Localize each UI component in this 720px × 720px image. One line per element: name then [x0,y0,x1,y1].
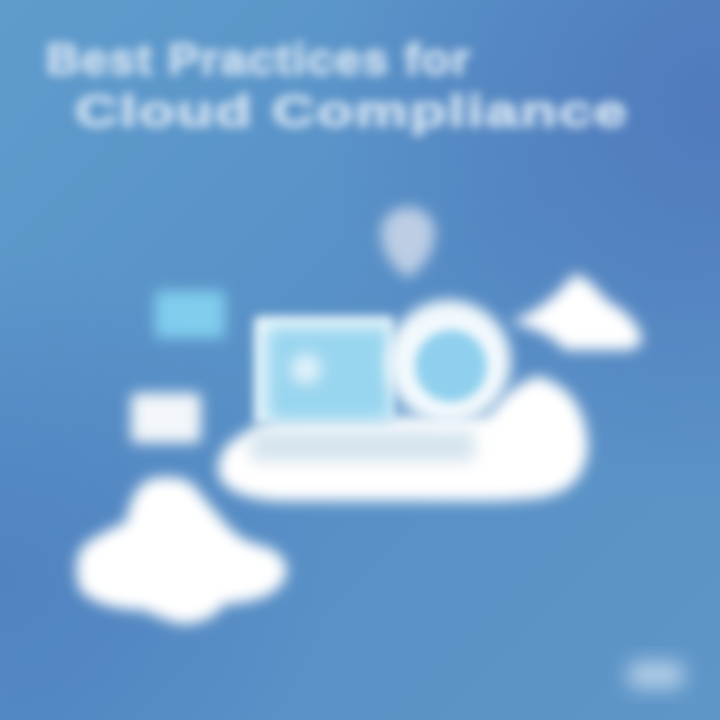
laptop base [250,430,475,462]
magnifier ring [387,300,511,424]
icon: light blue envelope [155,291,225,338]
icon: white note [131,393,201,443]
lower left cloud [76,477,286,624]
logo mark bottom right [628,662,684,688]
upper right cloud [510,274,642,350]
title line 2: Cloud Compliance [75,87,629,136]
laptop frame [254,316,394,424]
icon: location pin [381,207,435,278]
magnifier lens [415,330,487,402]
laptop screen [268,328,390,420]
title line 1: Best Practices for [46,35,471,84]
title [42,35,632,142]
main cloud [218,376,588,501]
